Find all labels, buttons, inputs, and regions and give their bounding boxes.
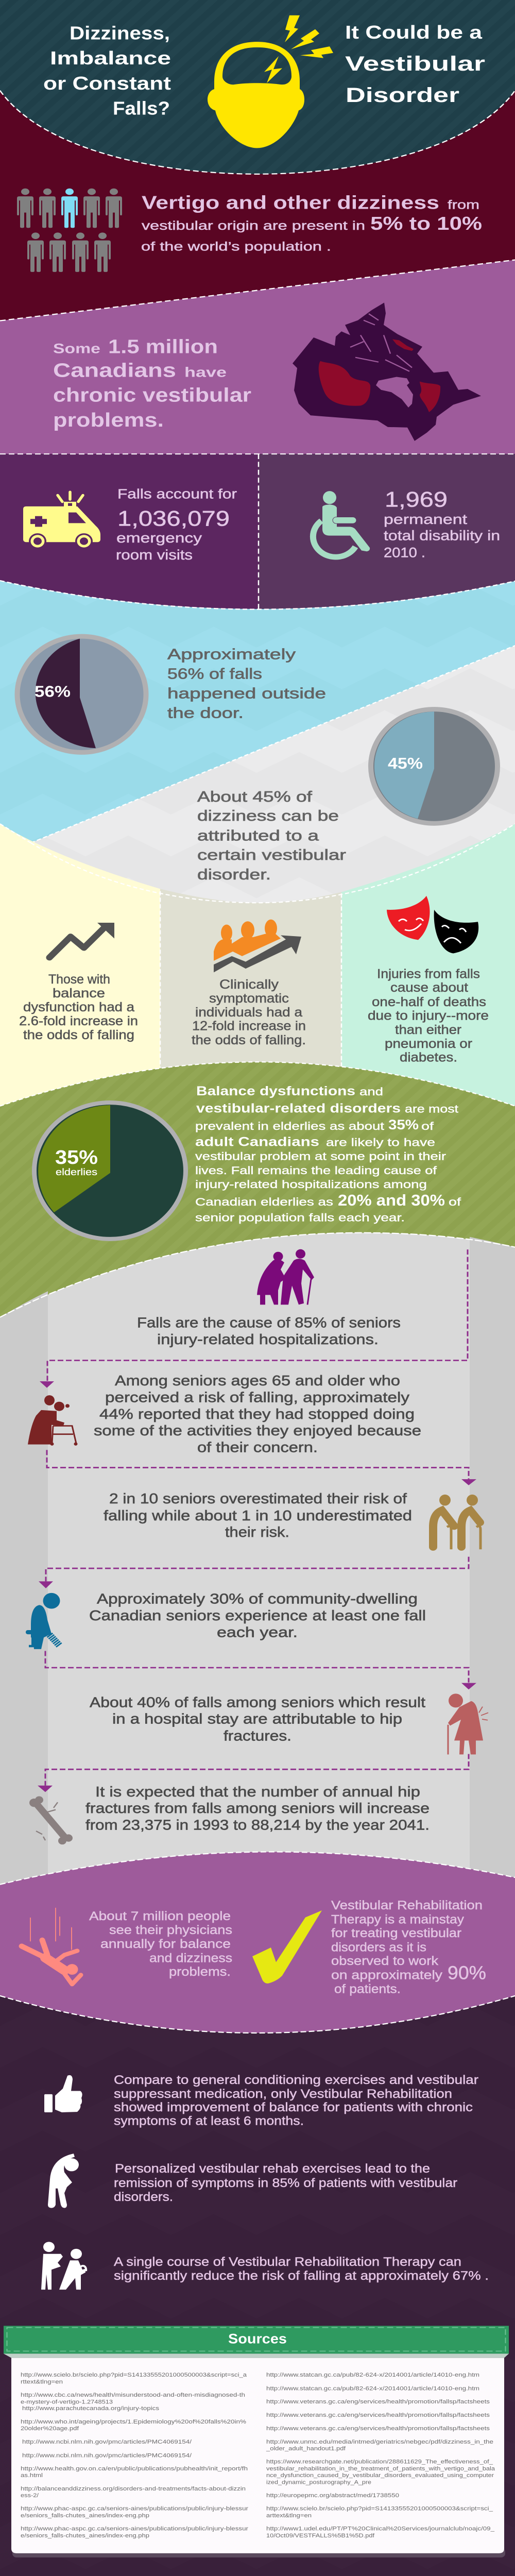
text: Canadians statistic: problems.	[53, 410, 164, 431]
title: question: or Constant	[43, 74, 171, 94]
text: left source list: http://www.scielo.br/scielo.php?pid=S14133555201000500003&script=sci_a	[21, 2371, 247, 2378]
text: clinically symptomatic: 12-fold increase in	[192, 1019, 306, 1033]
title: question: Imbalance	[50, 48, 171, 69]
text: seven million people: problems.	[169, 1965, 231, 1979]
text: stopped activities: Among seniors ages 65 and older who	[115, 1373, 400, 1389]
text: stopped activities: some of the activities they enjoyed because	[94, 1422, 421, 1439]
text: balance dysfunctions paragraph: prevalent in elderlies as about	[195, 1120, 385, 1132]
text: Canadians statistic: Canadians	[53, 360, 176, 381]
icon: person helping elder with cane	[41, 2242, 86, 2290]
text: falls cause hospitalizations: Falls are the cause of 85% of seniors	[137, 1315, 401, 1331]
text: annual hip fractures: It is expected that the number of annual hip	[95, 1784, 420, 1800]
text: symptom remission: Personalized vestibular rehab exercises lead to the	[115, 2162, 430, 2176]
text: permanent disability: permanent	[384, 512, 467, 528]
text: symptom remission: remission of symptoms in 85% of patients with vestibular	[114, 2176, 457, 2190]
text: balance dysfunctions paragraph: Balance dysfunctions	[196, 1083, 355, 1098]
text: vertigo prevalence: Vertigo and other dizziness	[142, 193, 439, 213]
text: estimating risk: their risk.	[225, 1524, 289, 1540]
text: right source list: https://www.researchgate.net/publication/288611629_The_effectiveness_of_	[266, 2458, 493, 2465]
text: annual hip fractures: fractures from falls among seniors will increase	[85, 1800, 430, 1817]
icon: seated person with leg cast	[26, 1593, 60, 1649]
text: seven million people: and dizziness	[149, 1952, 232, 1965]
icon: map of Canada	[293, 302, 481, 441]
text: balance dysfunctions paragraph: adult Canadians	[195, 1134, 319, 1149]
title: answer: Disorder	[346, 83, 459, 107]
text: balance dysfunctions paragraph	[195, 1083, 461, 1224]
text: rehabilitation therapy 90%	[331, 1899, 486, 1996]
text: 56% of falls: Approximately	[167, 646, 296, 663]
text: 45% of dizziness: dizziness can be	[197, 808, 339, 824]
heading: sources: Sources	[228, 2331, 287, 2347]
panel: elderly prevalence	[0, 1062, 515, 1346]
chart: 45% pie: 45%	[388, 754, 423, 772]
text: balance dysfunction: the odds of falling	[23, 1027, 134, 1042]
text: hip fractures: in a hospital stay are attributable to hip	[112, 1711, 402, 1727]
text: 45% of dizziness: certain vestibular	[197, 847, 346, 863]
icon: ambulance	[23, 492, 100, 549]
text: right source list: _older_adult_handout1.pdf	[266, 2445, 346, 2452]
arrow: dashed flow connector	[38, 1249, 476, 1792]
text: hip fractures	[90, 1694, 425, 1744]
text: left source list: http://balanceanddizziness.org/disorders-and-treatments/facts-about-dizzin	[21, 2485, 246, 2492]
text: clinically symptomatic: individuals had a	[195, 1005, 302, 1020]
text: left source list: e-mystery-of-vertigo-1.2748513	[21, 2398, 113, 2405]
icon: two seniors with canes	[433, 1495, 480, 1549]
text: emergency visits: Falls account for	[117, 486, 237, 501]
text: rehabilitation therapy 90%: on approximately	[331, 1969, 442, 1982]
text: left source list: http://www.who.int/ageing/projects/1.Epidemiology%20of%20falls%20in%	[21, 2418, 246, 2425]
panel: senior falls flow	[0, 1233, 515, 1950]
text: community dwelling seniors	[89, 1591, 426, 1640]
chart: 56% pie	[18, 636, 146, 752]
text: injuries from falls: Injuries from falls	[377, 967, 480, 981]
panel: sources	[4, 2326, 509, 2557]
text: emergency visits: room visits	[116, 547, 193, 563]
title: question: Falls?	[113, 98, 170, 119]
text: vertigo prevalence	[141, 193, 482, 253]
icon: stretching person	[48, 2154, 79, 2208]
text: balance dysfunctions paragraph: of	[421, 1120, 434, 1132]
text: left source list: http://www.cbc.ca/news/health/misunderstood-and-often-misdiagnosed-th	[21, 2392, 245, 2398]
text: hip fractures: About 40% of falls among seniors which result	[90, 1694, 425, 1710]
title: question: Dizziness,	[70, 23, 170, 44]
icon: person with walker	[28, 1395, 77, 1446]
text: right source list	[266, 2371, 495, 2539]
icon: rising arrow	[49, 923, 114, 958]
text: right source list: arttext&tlng=en	[266, 2512, 312, 2519]
text: emergency visits: 1,036,079	[117, 507, 230, 531]
panel: rehabilitation therapy	[0, 1852, 515, 2033]
text: right source list: http://www.veterans.gc.ca/eng/services/health/promotion/fallsp/factsheets	[266, 2425, 490, 2432]
title: answer: It Could be a	[345, 23, 483, 43]
text: 45% of dizziness	[197, 788, 346, 883]
text: reduced risk of falling: A single course of Vestibular Rehabilitation Therapy can	[114, 2255, 461, 2269]
text: vertigo prevalence: of the world’s population .	[141, 240, 331, 253]
text: left source list: as.html	[21, 2472, 43, 2479]
text: balance dysfunctions paragraph: senior population falls each year.	[195, 1211, 405, 1224]
text: left source list	[21, 2371, 248, 2539]
text: injuries from falls: than either	[395, 1022, 461, 1037]
text: balance dysfunctions paragraph: vestibular-related disorders	[196, 1101, 401, 1115]
text: falls cause hospitalizations	[137, 1315, 401, 1348]
text: 56% of falls: 56% of falls	[167, 666, 262, 682]
text: left source list: http://www.ncbi.nlm.nih.gov/pmc/articles/PMC4069154/	[22, 2452, 192, 2459]
text: right source list: http://www.unmc.edu/media/intmed/geriatrics/nebgec/pdf/dizziness_in_the	[266, 2438, 493, 2445]
text: annual hip fractures	[85, 1784, 430, 1833]
icon: thumbs up	[44, 2075, 82, 2112]
icon: wheelchair	[313, 491, 370, 557]
text: left source list: http://www.phac-aspc.gc.ca/seniors-aines/publications/public/injury-blessur	[21, 2505, 248, 2512]
text: injuries from falls: one-half of deaths	[372, 994, 486, 1009]
text: community dwelling seniors: Approximately 30% of community-dwelling	[97, 1591, 418, 1607]
text: balance dysfunctions paragraph: Canadian elderlies as	[195, 1195, 333, 1208]
text: balance dysfunctions paragraph: are likely to have	[326, 1136, 435, 1148]
text: rehabilitation therapy 90%: of patients.	[334, 1982, 401, 1996]
text: permanent disability: 1,969	[385, 487, 448, 512]
text: right source list: nce_dysfunction_caused_by_vestibular_disorders_evaluated_using_computer	[266, 2472, 494, 2479]
text: Canadians statistic: chronic vestibular	[53, 384, 251, 406]
text: 45% of dizziness: attributed to a	[197, 827, 319, 844]
text: 56% of falls: happened outside	[167, 685, 326, 702]
text: improvement of balance: showed improvement of balance for patients with chronic	[114, 2100, 473, 2114]
panel: three fall risk columns	[0, 824, 515, 1123]
text: balance dysfunctions paragraph: lives. Fall remains the leading cause of	[195, 1164, 437, 1177]
text: right source list: http://www.statcan.gc.ca/pub/82-624-x/2014001/article/14010-eng.htm	[266, 2385, 479, 2392]
text: balance dysfunction: 2.6-fold increase in	[19, 1013, 138, 1028]
text: stopped activities: perceived a risk of falling, approximately	[105, 1389, 409, 1405]
text: left source list: http://www.ncbi.nlm.nih.gov/pmc/articles/PMC4069154/	[22, 2438, 192, 2445]
text: Canadians statistic	[53, 336, 251, 431]
text: stopped activities: of their concern.	[197, 1439, 318, 1455]
text: clinically symptomatic: the odds of falling.	[192, 1032, 306, 1047]
text: right source list: http://www.veterans.gc.ca/eng/services/health/promotion/fallsp/factsheets	[266, 2398, 490, 2405]
panel: title header	[0, 0, 515, 174]
text: falls cause hospitalizations: injury-related hospitalizations.	[157, 1331, 379, 1348]
text: emergency visits	[116, 486, 237, 563]
text: annual hip fractures: from 23,375 in 1993 to 88,214 by the year 2041.	[85, 1817, 430, 1833]
text: reduced risk of falling	[114, 2255, 489, 2283]
text: seven million people: About 7 million people	[89, 1909, 231, 1923]
text: improvement of balance: symptoms of at least 6 months.	[114, 2114, 304, 2128]
text: improvement of balance: Compare to general conditioning exercises and vestibular	[114, 2073, 478, 2087]
text: permanent disability: 2010 .	[384, 545, 425, 561]
panel: 1.5 million Canadians	[0, 260, 515, 454]
text: Canadians statistic: 1.5 million	[108, 336, 218, 358]
text: emergency visits: emergency	[116, 530, 202, 546]
text: balance dysfunctions paragraph: vestibular problem at some point in their	[195, 1149, 446, 1162]
text: stopped activities: 44% reported that they had stopped doing	[99, 1406, 415, 1422]
text: left source list: rttext&tlng=en	[21, 2378, 63, 2385]
icon: head with lightning bolts	[208, 15, 333, 148]
text: seven million people	[89, 1909, 232, 1979]
text: rehabilitation therapy 90%: Therapy is a mainstay	[331, 1913, 464, 1926]
text: rehabilitation therapy 90%: observed to work	[331, 1954, 438, 1968]
text: community dwelling seniors: Canadian seniors experience at least one fall	[89, 1607, 426, 1624]
text: left source list: http://www.parachutecanada.org/injury-topics	[22, 2405, 159, 2412]
icon: comedy and tragedy masks	[387, 896, 478, 953]
panel: falls and disability background chevrons	[0, 575, 515, 928]
icon: elderly couple walking	[257, 1249, 314, 1304]
text: 45% of dizziness: About 45% of	[197, 788, 313, 805]
text: stopped activities	[94, 1373, 421, 1455]
text: balance dysfunction: dysfunction had a	[23, 999, 134, 1014]
text: right source list: http://www.veterans.gc.ca/eng/services/health/promotion/fallsp/factsheets	[266, 2412, 490, 2418]
text: balance dysfunctions paragraph: injury-related hospitalizations among	[195, 1178, 427, 1191]
chart: 35% elderlies pie: 35%	[55, 1147, 98, 1168]
text: balance dysfunctions paragraph: are most	[405, 1103, 459, 1115]
text: 56% of falls	[167, 646, 326, 721]
text: injuries from falls: cause about	[390, 980, 469, 995]
text: estimating risk: 2 in 10 seniors overestimated their risk of	[109, 1490, 407, 1507]
text: clinically symptomatic: Clinically	[219, 977, 279, 992]
text: balance dysfunction: balance	[53, 986, 105, 1001]
panel: vestibular rehabilitation benefits	[0, 1973, 515, 2576]
text: right source list: http://www1.udel.edu/PT/PT%20Clinical%20Services/journalclub/noajc/09_	[266, 2525, 494, 2532]
text: improvement of balance	[114, 2073, 478, 2128]
text: balance dysfunctions paragraph: of	[449, 1195, 461, 1208]
text: Canadians statistic: have	[184, 365, 227, 380]
text: balance dysfunctions paragraph: 35%	[388, 1117, 419, 1133]
text: permanent disability: total disability in	[384, 528, 500, 544]
panel: emergency room and disability	[0, 454, 515, 609]
text: left source list: 20older%20age.pdf	[21, 2425, 79, 2432]
text: Canadians statistic: Some	[53, 341, 100, 357]
text: balance dysfunction	[19, 972, 138, 1042]
text: injuries from falls: due to injury--more	[368, 1008, 489, 1023]
text: seven million people: annually for balance	[100, 1937, 231, 1951]
chart: 56% pie: 56%	[35, 683, 71, 700]
text: rehabilitation therapy 90%: disorders as it is	[331, 1941, 426, 1954]
text: injuries from falls: pneumonia or	[385, 1036, 472, 1051]
title: question	[43, 23, 171, 119]
text: right source list: 10/Oct09/VESTFALLS%5B1%5D.pdf	[266, 2532, 375, 2539]
text: injuries from falls	[368, 967, 489, 1064]
text: permanent disability	[384, 487, 500, 561]
text: clinically symptomatic	[192, 977, 306, 1047]
text: right source list: http://www.statcan.gc.ca/pub/82-624-x/2014001/article/14010-eng.htm	[266, 2371, 479, 2378]
text: left source list: e/seniors_falls-chutes_aines/index-eng.php	[21, 2532, 149, 2539]
text: estimating risk	[104, 1490, 412, 1540]
text: vertigo prevalence: from	[448, 198, 479, 212]
icon: falling person	[22, 1908, 81, 1984]
text: rehabilitation therapy 90%: for treating vestibular	[331, 1926, 461, 1940]
chart: 35% elderlies pie: elderlies	[56, 1167, 97, 1178]
text: 45% of dizziness: disorder.	[197, 867, 271, 883]
text: 56% of falls: the door.	[167, 705, 244, 721]
text: estimating risk: falling while about 1 in 10 underestimated	[104, 1507, 412, 1524]
text: balance dysfunction: Those with	[48, 972, 110, 987]
title: answer: Vestibular	[345, 52, 485, 75]
icon: row of people with one highlighted	[17, 189, 122, 272]
text: symptom remission: disorders.	[114, 2190, 173, 2204]
text: rehabilitation therapy 90%: 90%	[448, 1963, 486, 1984]
text: left source list: ess-2/	[21, 2492, 39, 2499]
text: vertigo prevalence: vestibular origin are present in	[142, 219, 365, 233]
text: right source list: ized_dynamic_posturography_A_pre	[266, 2479, 371, 2485]
icon: people with rising arrow	[214, 920, 301, 972]
icon: check mark	[252, 1910, 322, 1984]
text: improvement of balance: suppressant medication, only Vestibular Rehabilitation	[114, 2087, 452, 2101]
text: clinically symptomatic: symptomatic	[209, 991, 289, 1006]
chart: 35% elderlies pie	[34, 1103, 185, 1239]
text: left source list: e/seniors_falls-chutes_aines/index-eng.php	[21, 2512, 149, 2519]
text: right source list: http://europepmc.org/abstract/med/1738550	[266, 2492, 399, 2499]
panel: vertigo statistic	[0, 70, 515, 330]
text: right source list: http://www.scielo.br/scielo.php?pid=S14133555201000500003&script=sci_	[266, 2505, 493, 2512]
text: symptom remission	[114, 2162, 457, 2204]
text: reduced risk of falling: significantly reduce the risk of falling at approximately 67% .	[114, 2269, 489, 2283]
icon: broken bone	[29, 1796, 73, 1844]
text: right source list: vestibular_rehabilitation_in_the_treatment_of_patients_with_vertigo_and_bala	[266, 2465, 495, 2472]
chart: 45% pie	[371, 709, 497, 823]
text: vertigo prevalence: 5% to 10%	[370, 214, 482, 234]
text: rehabilitation therapy 90%: Vestibular Rehabilitation	[331, 1899, 483, 1912]
text: injuries from falls: diabetes.	[400, 1050, 457, 1064]
title: answer	[345, 23, 485, 107]
text: community dwelling seniors: each year.	[217, 1624, 298, 1640]
text: hip fractures: fractures.	[224, 1728, 291, 1744]
icon: senior with back pain	[448, 1693, 488, 1754]
text: balance dysfunctions paragraph: and	[359, 1085, 383, 1098]
text: left source list: http://www.phac-aspc.gc.ca/seniors-aines/publications/public/injury-blessur	[21, 2525, 248, 2532]
text: seven million people: see their physicians	[109, 1923, 232, 1937]
text: left source list: http://www.health.gov.on.ca/en/public/publications/pubhealth/init_report/fh	[21, 2465, 248, 2472]
text: balance dysfunctions paragraph: 20% and 30%	[338, 1192, 445, 1209]
